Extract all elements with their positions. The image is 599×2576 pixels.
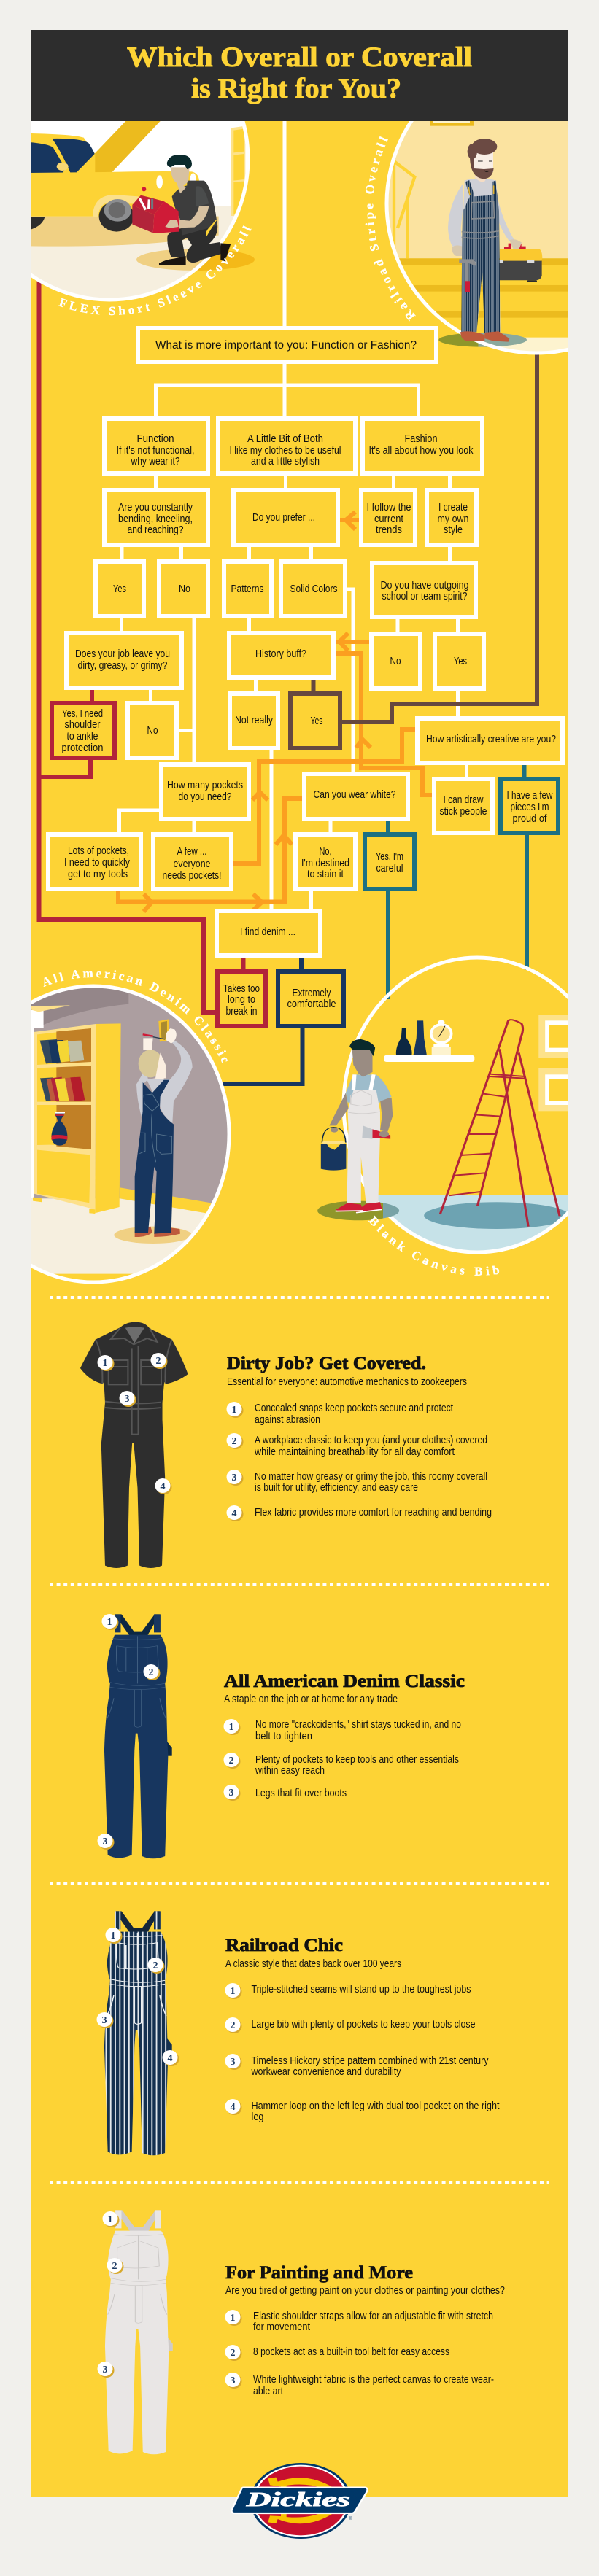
box: patterns: Patterns	[231, 583, 264, 595]
subheading: A classic style that dates back over 100 years	[225, 1958, 401, 1970]
coverall markers: 4	[161, 1481, 165, 1492]
box: i create my own style: my own	[438, 513, 468, 525]
box: shoulder to ankle protection	[52, 703, 115, 758]
item 4: Hammer loop on the left leg with dual tool pocket on the right	[251, 2100, 500, 2112]
box: yes (history)	[290, 694, 340, 748]
item 3: No matter how greasy or grimy the job, this roomy coverall	[255, 1470, 487, 1483]
box: shoulder to ankle protection: Yes, I need	[62, 707, 103, 720]
coverall markers: 2	[156, 1356, 161, 1367]
curved label: All American Denim Classic: All American Denim Classic	[44, 970, 228, 1063]
box: pieces proud of: pieces I'm	[511, 801, 549, 813]
item 3: is built for utility, efficiency, and easy care	[255, 1481, 418, 1494]
item 2	[225, 2017, 476, 2033]
box: pieces proud of: proud of	[512, 812, 547, 825]
box: function: Function	[137, 432, 174, 445]
item 4: 4	[231, 2102, 235, 2113]
box: yes (history): Yes	[311, 715, 322, 727]
box: school spirit: school or team spirit?	[382, 590, 467, 602]
item 4	[226, 1505, 492, 1521]
teal path lines	[388, 765, 527, 999]
item 3: 3	[232, 1473, 236, 1483]
box: dirty job question: dirty, greasy, or grimy?	[77, 659, 168, 672]
box: function or fashion question	[138, 328, 436, 362]
item 2: Large bib with plenty of pockets to keep your tools close	[251, 2018, 476, 2030]
box: no (job): No	[147, 724, 158, 737]
item 2: 2	[229, 1756, 233, 1766]
box: function or fashion question: What is more important to you: Function or Fashion?	[155, 339, 417, 352]
coverall markers: 1	[102, 1358, 108, 1369]
box: takes too long to break in: Takes too	[223, 982, 260, 995]
box: destined to stain it: I'm destined	[301, 857, 349, 869]
box: a few pockets	[153, 834, 231, 889]
railroad markers: 1	[111, 1931, 115, 1941]
item 3: Legs that fit over boots	[255, 1787, 347, 1799]
heading: For Painting and More	[225, 2263, 413, 2283]
box: takes too long to break in: break in	[226, 1005, 257, 1017]
orange arrows	[118, 512, 432, 912]
item 1: 1	[231, 2313, 235, 2324]
item 1: No more "crackcidents," shirt stays tucked in, and no	[255, 1718, 461, 1731]
striped overalls illustration	[104, 1911, 172, 2155]
box: yes	[96, 562, 144, 616]
box: lots of pockets: get to my tools	[68, 868, 128, 880]
item 2	[223, 1753, 459, 1777]
item 3	[223, 1785, 347, 1801]
item 4	[225, 2099, 500, 2123]
box: yes careful: careful	[376, 862, 403, 874]
box: not really	[230, 694, 278, 748]
painting markers: 1	[108, 2214, 112, 2225]
item 2: within easy reach	[255, 1764, 325, 1777]
box: yes: Yes	[113, 583, 126, 595]
item 4: 4	[232, 1508, 236, 1519]
logo: Dickies	[232, 2463, 367, 2539]
box: i follow the current trends: trends	[376, 524, 402, 536]
box: fashion: It's all about how you look	[369, 444, 474, 457]
box: takes too long to break in	[217, 971, 266, 1026]
item 1	[226, 1402, 454, 1426]
box: stick people	[434, 779, 492, 833]
red path line	[39, 277, 244, 1012]
box: function: why wear it?	[131, 455, 179, 468]
item 3: Timeless Hickory stripe pattern combined with 21st century	[251, 2055, 489, 2067]
item 3: workwear convenience and durability	[251, 2065, 401, 2078]
box: fashion	[363, 419, 482, 473]
box: pieces proud of	[501, 779, 558, 833]
item 3: White lightweight fabric is the perfect canvas to create wear-	[253, 2373, 494, 2386]
item 3: 3	[229, 1788, 233, 1799]
item 2: A workplace classic to keep you (and your clothes) covered	[255, 1434, 487, 1446]
box: patterns	[224, 562, 271, 616]
box: history buff	[229, 633, 333, 678]
box: no	[159, 562, 208, 616]
box: school spirit: Do you have outgoing	[381, 579, 468, 591]
section: dirty job coverall	[80, 1322, 492, 1568]
box: i follow the current trends: I follow the	[366, 501, 411, 513]
coverall markers: 3	[124, 1394, 130, 1405]
illustration: railroad overall scene	[385, 121, 568, 354]
painting markers: 3	[102, 2364, 108, 2375]
box: lots of pockets: Lots of pockets,	[68, 845, 129, 857]
box: a few pockets: A few ...	[177, 845, 207, 858]
item 1	[225, 1983, 471, 1999]
coverall markers	[98, 1353, 172, 1494]
logo: Dickies: Dickies	[245, 2488, 350, 2510]
item 3: 3	[231, 2057, 235, 2068]
title banner: is Right for You?	[191, 73, 401, 104]
denim markers: 2	[149, 1667, 153, 1678]
box: yes careful	[365, 834, 414, 889]
heading: All American Denim Classic	[224, 1672, 465, 1691]
item 1: Elastic shoulder straps allow for an adjustable fit with stretch	[253, 2310, 493, 2322]
box: destined to stain it: No,	[320, 845, 331, 858]
box: how many pockets: How many pockets	[167, 779, 243, 791]
navy path line	[219, 958, 302, 1084]
box: stick people: I can draw	[444, 794, 484, 806]
box: can you wear white: Can you wear white?	[314, 788, 395, 801]
box: dirty job question	[66, 633, 182, 688]
box: a little bit of both: I like my clothes to be useful	[229, 444, 341, 457]
item 3: 3	[231, 2375, 235, 2386]
box: a few pockets: everyone	[174, 858, 210, 870]
item 1: for movement	[253, 2321, 311, 2333]
box: do you prefer: Do you prefer ...	[252, 511, 315, 524]
box: i find denim: I find denim ...	[240, 926, 295, 938]
railroad markers	[96, 1928, 179, 2066]
box: function	[104, 419, 208, 473]
box: fashion: Fashion	[404, 432, 438, 445]
item 1: Triple-stitched seams will stand up to the toughest jobs	[251, 1983, 471, 1995]
illustration: mechanic scene	[31, 121, 255, 302]
box: no (spirit)	[371, 634, 420, 688]
subheading: A staple on the job or at home for any trade	[224, 1693, 398, 1705]
box: i create my own style: I create	[438, 501, 468, 513]
section: railroad chic	[96, 1911, 500, 2155]
box: extremely comfortable	[278, 971, 344, 1026]
item 2: 2	[231, 2020, 235, 2031]
flowchart connector lines	[39, 121, 537, 1084]
illustration: blank canvas bib scene	[317, 955, 568, 1254]
painting markers	[98, 2211, 124, 2378]
box: are you constantly bending: and reaching?	[127, 524, 184, 536]
box: i follow the current trends	[361, 490, 415, 545]
item 1: Concealed snaps keep pockets secure and protect	[255, 1402, 454, 1414]
box: not really: Not really	[235, 714, 273, 726]
item 3	[225, 2373, 494, 2397]
box: can you wear white	[304, 774, 408, 819]
denim markers: 3	[102, 1836, 108, 1847]
box: school spirit	[372, 563, 476, 617]
box: lots of pockets: I need to quickly	[64, 856, 130, 869]
box: yes (spirit)	[435, 634, 484, 688]
box: no (spirit): No	[390, 655, 401, 667]
item 2	[225, 2345, 449, 2361]
box: a little bit of both: and a little stylish	[251, 455, 320, 468]
curved label: Railroad Stripe Overall: Railroad Stripe Overall	[365, 136, 416, 321]
item 4: leg	[251, 2111, 264, 2123]
box: shoulder to ankle protection: protection	[61, 742, 104, 754]
box: takes too long to break in: long to	[228, 993, 255, 1006]
section: all american denim classic	[98, 1614, 465, 1858]
item 1: 1	[229, 1722, 233, 1733]
title banner: Which Overall or Coverall	[127, 42, 472, 73]
box: no: No	[179, 583, 190, 595]
box: a few pockets: needs pockets!	[162, 869, 222, 882]
curved label: Blank Canvas Bib: Blank Canvas Bib	[368, 1215, 499, 1276]
item 2: while maintaining breathability for all day comfort	[254, 1446, 455, 1458]
subheading: Are you tired of getting paint on your clothes or painting your clothes?	[225, 2284, 505, 2297]
box: destined to stain it	[295, 834, 355, 889]
box: artistically creative: How artistically creative are you?	[426, 733, 556, 745]
box: yes careful: Yes, I'm	[376, 850, 403, 863]
box: pieces proud of: I have a few	[506, 789, 553, 802]
brown path line	[314, 343, 537, 722]
subheading: Essential for everyone: automotive mechanics to zookeepers	[227, 1376, 467, 1388]
item 1: against abrasion	[255, 1413, 320, 1426]
box: are you constantly bending	[104, 490, 208, 545]
white overalls illustration	[105, 2210, 173, 2454]
logo: Dickies: ®	[349, 2516, 352, 2521]
box: how many pockets: do you need?	[178, 791, 232, 803]
item 3: able art	[253, 2385, 284, 2397]
denim overalls illustration	[104, 1614, 172, 1858]
box: i find denim	[217, 911, 320, 955]
box: stick people: stick people	[439, 805, 487, 818]
illustration: all american denim scene	[31, 985, 231, 1284]
box: extremely comfortable: Extremely	[292, 987, 331, 999]
box: i follow the current trends: current	[374, 513, 404, 525]
box: yes (spirit): Yes	[454, 655, 467, 667]
railroad markers: 4	[168, 2053, 172, 2064]
item 2: Plenty of pockets to keep tools and other essentials	[255, 1753, 459, 1766]
box: history buff: History buff?	[255, 648, 306, 660]
box: no (job)	[128, 703, 177, 758]
curved label: FLEX Short Sleeve Coverall: FLEX Short Sleeve Coverall	[58, 225, 252, 315]
box: i create my own style	[427, 490, 476, 545]
item 4: Flex fabric provides more comfort for reaching and bending	[255, 1506, 492, 1518]
item 2: 2	[232, 1436, 236, 1447]
box: how many pockets	[161, 764, 249, 819]
denim markers	[98, 1614, 161, 1850]
denim markers: 1	[107, 1617, 112, 1628]
coverall illustration	[80, 1322, 188, 1568]
box: shoulder to ankle protection: shoulder	[64, 718, 101, 731]
box: i create my own style: style	[444, 524, 463, 536]
box: are you constantly bending: Are you constantly	[118, 501, 193, 513]
item 1: 1	[232, 1405, 236, 1416]
item 1: belt to tighten	[255, 1730, 312, 1742]
item 3	[225, 2054, 489, 2078]
box: solid colors: Solid Colors	[290, 583, 337, 595]
item 1: 1	[231, 1986, 235, 1997]
item 2: 8 pockets act as a built-in tool belt for easy access	[253, 2346, 449, 2358]
railroad markers: 3	[102, 2015, 107, 2026]
item 2	[226, 1433, 487, 1458]
item 1	[223, 1718, 461, 1742]
item 3	[226, 1470, 487, 1494]
box: a little bit of both	[218, 419, 355, 473]
box: solid colors	[281, 562, 345, 616]
box: lots of pockets	[48, 834, 141, 889]
box: shoulder to ankle protection: to ankle	[67, 730, 98, 742]
title banner	[31, 30, 568, 121]
box: a little bit of both: A Little Bit of Both	[247, 432, 323, 445]
heading: Dirty Job? Get Covered.	[227, 1354, 426, 1373]
item 1	[225, 2310, 493, 2333]
box: dirty job question: Does your job leave you	[75, 648, 170, 660]
box: are you constantly bending: bending, kneeling,	[118, 513, 193, 525]
box: extremely comfortable: comfortable	[287, 998, 336, 1010]
box: function: If it's not functional,	[117, 444, 194, 457]
railroad markers: 2	[153, 1960, 158, 1971]
section: for painting and more	[98, 2210, 505, 2454]
heading: Railroad Chic	[225, 1936, 343, 1955]
box: do you prefer	[233, 490, 338, 545]
box: destined to stain it: to stain it	[307, 868, 344, 880]
painting markers: 2	[112, 2261, 117, 2272]
item 2: 2	[231, 2348, 235, 2359]
box: artistically creative	[417, 718, 563, 763]
